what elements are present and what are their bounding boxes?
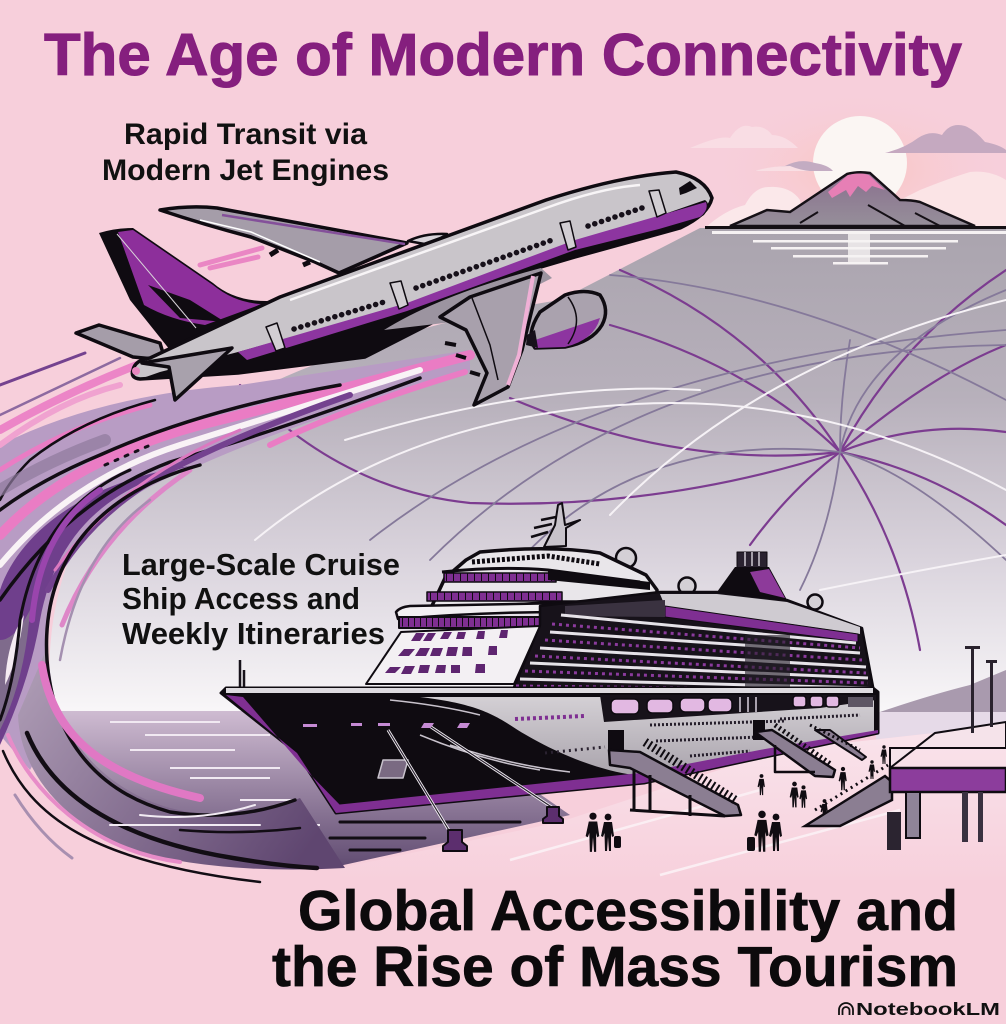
boarding stair near pier — [805, 765, 901, 850]
bollards — [443, 830, 467, 851]
swoosh base fill — [0, 350, 470, 770]
doors — [266, 190, 666, 351]
hull shadow streaks — [390, 700, 570, 772]
white forward lounge — [366, 626, 540, 684]
mast — [531, 503, 580, 547]
label: cruise ships: Ship Access and — [122, 581, 360, 616]
upper decks — [396, 549, 657, 628]
wing fairing — [384, 268, 552, 330]
swoosh lower band — [18, 650, 345, 870]
label: cruise ships: Large-Scale Cruise — [122, 547, 400, 582]
label: jet engines — [102, 118, 389, 187]
hull grey side — [420, 697, 874, 776]
belly — [140, 200, 708, 379]
grey routes — [370, 275, 1006, 590]
NotebookLM logo — [839, 999, 1000, 1019]
passenger windows — [294, 208, 642, 329]
hull — [221, 688, 878, 813]
trail strokes — [0, 355, 470, 535]
subtitle: Global Accessibility and — [298, 879, 958, 943]
hull windows — [515, 716, 585, 719]
bow portholes — [303, 723, 470, 728]
sea and sky gradient field — [49, 228, 1006, 720]
horizontal stabiliser — [76, 325, 165, 360]
purple stripe — [238, 202, 707, 360]
far wing — [160, 207, 447, 273]
great-circle route network — [240, 270, 1006, 650]
promenade deck with lifeboats — [600, 695, 876, 722]
swoosh curving strokes — [47, 465, 295, 815]
label: jet engines: Rapid Transit via — [124, 118, 367, 151]
top highlight — [290, 185, 640, 300]
cruise ship — [221, 503, 878, 851]
funnel — [717, 552, 787, 600]
swoosh dark left fill — [0, 466, 190, 745]
white routes — [255, 300, 1006, 590]
scene: sun, clouds and volcano — [690, 90, 1006, 250]
lower water — [55, 711, 570, 868]
subtitle: the Rise of Mass Tourism — [272, 935, 958, 999]
subtitle — [272, 879, 958, 999]
volcano — [730, 172, 975, 226]
pier terminal — [890, 722, 1006, 842]
water highlights — [110, 722, 320, 825]
water wave streaks near hull — [330, 822, 520, 850]
near wing — [440, 273, 541, 405]
passengers on the dock — [586, 745, 887, 852]
label: cruise ships: Weekly Itineraries — [122, 616, 385, 651]
dock streaks — [510, 790, 900, 875]
gangways — [609, 725, 866, 816]
NotebookLM logo: NotebookLM — [856, 999, 1000, 1019]
mooring lines — [388, 727, 563, 851]
airplane — [76, 172, 712, 405]
title: The Age of Modern Connectivity — [44, 22, 962, 88]
jet and water trail swoosh — [0, 350, 470, 882]
clouds — [690, 125, 1006, 228]
background hills right — [880, 670, 1006, 712]
engine — [526, 292, 606, 348]
shell doors — [608, 730, 624, 752]
purple routes — [240, 270, 1006, 650]
right water strip — [876, 712, 1006, 742]
ventral fin — [142, 348, 232, 400]
main block with cabin decks — [512, 592, 874, 692]
tiny dots in trail — [105, 443, 155, 465]
radar domes — [616, 548, 822, 610]
fuselage — [132, 172, 712, 379]
label: cruise ships — [122, 547, 400, 651]
tail fin — [99, 228, 270, 350]
dock — [0, 725, 1006, 1024]
sun reflection on water — [712, 231, 1006, 264]
label: jet engines: Modern Jet Engines — [102, 154, 389, 187]
bow mast — [240, 660, 244, 690]
lamp posts — [965, 646, 997, 733]
horizon line — [705, 226, 1006, 229]
nose tip and cockpit — [679, 181, 697, 195]
icon: sun — [813, 116, 907, 210]
